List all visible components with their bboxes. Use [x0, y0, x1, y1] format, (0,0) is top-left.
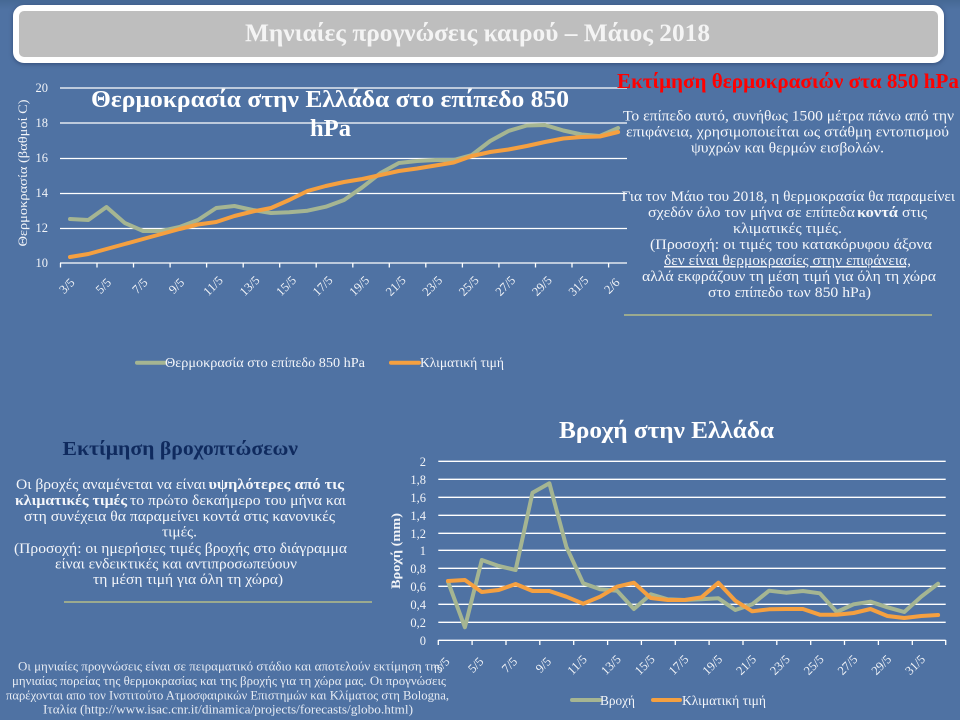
temperature legend: Θερμοκρασία στο επίπεδο 850 hPa — [165, 355, 365, 370]
temperature y axis labels: 18 — [36, 116, 48, 130]
temperature chart title: hPa — [310, 116, 351, 142]
temperature x axis labels: 11/5 — [200, 273, 226, 299]
text block: rainfall outlook: τιμές. — [162, 524, 197, 540]
text block: May outlook: σχεδόν όλο τον μήνα σε επίπεδα — [648, 205, 855, 221]
rainfall x axis labels: 27/5 — [835, 652, 860, 678]
temperature x axis labels: 31/5 — [566, 273, 591, 299]
temperature x axis labels: 21/5 — [383, 273, 409, 299]
rainfall x axis labels: 19/5 — [700, 652, 725, 678]
text block: rainfall outlook: τη μέση τιμή για όλη τη χώρα) — [93, 572, 283, 588]
rainfall x axis labels: 13/5 — [598, 652, 624, 678]
rainfall climatic value line — [448, 580, 938, 618]
rainfall x axis labels: 5/5 — [465, 654, 486, 676]
rainfall x axis labels: 11/5 — [565, 652, 590, 678]
temperature x axis labels: 15/5 — [273, 273, 299, 299]
text block: May outlook: κλιματικές τιμές. — [733, 221, 842, 237]
temperature x axis labels: 27/5 — [493, 273, 518, 299]
rainfall y axis labels: 0,4 — [410, 598, 427, 612]
temperature x axis labels: 17/5 — [310, 273, 336, 299]
text block: level description — [623, 108, 954, 156]
footer note: Ιταλία (http://www.isac.cnr.it/dinamica/projects/forecasts/globo.html) — [43, 702, 413, 716]
text block: May outlook: δεν είναι θερμοκρασίες στην επιφάνεια, — [664, 253, 911, 269]
rainfall y axis labels: 1,2 — [410, 527, 426, 541]
rainfall y axis labels — [410, 455, 427, 648]
text block: May outlook — [622, 189, 955, 301]
rainfall y axis labels: 1,6 — [410, 491, 426, 505]
rainfall x axis labels — [431, 652, 928, 678]
text block: May outlook: (Προσοχή: οι τιμές του κατακόρυφου άξονα — [650, 237, 932, 253]
rainfall y axis title: Βροχή (mm) — [389, 513, 403, 589]
text block: level description: ψυχρών και θερμών εισβολών. — [691, 140, 884, 156]
rainfall x axis labels: 31/5 — [902, 652, 928, 678]
text block: May outlook: αλλά εκφράζουν τη μέση τιμή για όλη τη χώρα — [642, 269, 936, 285]
temperature x axis labels: 3/5 — [56, 275, 78, 297]
rainfall y axis labels: 1,8 — [410, 473, 426, 487]
text block: May outlook: κοντά — [857, 205, 899, 221]
text block: rainfall outlook: κλιματικές τιμές — [15, 493, 128, 509]
header banner — [16, 8, 941, 60]
rainfall line chart — [389, 418, 946, 709]
rainfall y axis labels: 1,4 — [410, 509, 427, 523]
temperature y axis labels: 16 — [36, 151, 48, 165]
text block: rainfall outlook — [14, 477, 347, 588]
text block: May outlook: στο επίπεδο των 850 hPa) — [708, 285, 871, 301]
climatic value line — [70, 132, 618, 257]
temperature legend: Κλιματική τιμή — [420, 355, 504, 370]
temperature legend — [137, 355, 504, 370]
navy heading: Εκτίμηση βροχοπτώσεων — [62, 438, 298, 460]
temperature x axis labels: 9/5 — [166, 275, 187, 297]
text block: rainfall outlook: στη συνέχεια θα παραμείνει κοντά στις κανονικές — [24, 509, 335, 525]
rainfall x axis labels: 3/5 — [431, 654, 453, 676]
text block: rainfall outlook: είναι ενδεικτικές και αντιπροσωπεύουν — [55, 556, 297, 572]
panel: temperature estimate — [617, 69, 959, 316]
temperature x axis labels: 23/5 — [419, 273, 445, 299]
rainfall x axis labels: 17/5 — [666, 652, 691, 678]
rainfall x axis labels: 15/5 — [632, 652, 658, 678]
rainfall y axis labels: 0,8 — [410, 562, 426, 576]
temperature y axis labels: 20 — [36, 81, 48, 95]
temperature x axis labels: 5/5 — [93, 275, 114, 297]
text block: May outlook: στις — [902, 205, 927, 221]
temperature y axis labels: 10 — [36, 256, 48, 270]
temperature y axis labels: 14 — [36, 186, 49, 200]
rainfall x axis labels: 25/5 — [801, 652, 827, 678]
temperature y axis labels — [36, 81, 49, 270]
text block: level description: Το επίπεδο αυτό, συνήθως 1500 μέτρα πάνω από την — [623, 108, 954, 124]
text block: rainfall outlook: (Προσοχή: οι ημερήσιες τιμές βροχής στο διάγραμμα — [14, 541, 347, 557]
temperature line chart — [16, 81, 627, 370]
temperature y axis title: Θερμοκρασία (βαθμοί C) — [16, 100, 30, 246]
temperature chart title: Θερμοκρασία στην Ελλάδα στο επίπεδο 850 — [91, 87, 569, 113]
divider — [624, 314, 932, 316]
temperature x axis labels: 25/5 — [456, 273, 482, 299]
rainfall legend: Βροχή — [600, 694, 635, 709]
text block: rainfall outlook: υψηλότερες από τις — [208, 477, 345, 493]
text block: May outlook: Για τον Μάιο του 2018, η θερμοκρασία θα παραμείνει — [622, 189, 955, 205]
footer note: παρέχονται απο τον Ινστιτούτο Ατμοσφαιρικών Επιστημών και Κλίματος στη Bologna, — [6, 688, 449, 702]
text block: rainfall outlook: το πρώτο δεκαήμερο του μήνα και — [130, 493, 346, 509]
temperature chart title — [91, 87, 569, 142]
red heading: Εκτίμηση θερμοκρασιών στα 850 hPa — [617, 69, 959, 93]
panel: rainfall estimate — [14, 438, 372, 603]
chart gridlines and axis — [60, 88, 627, 268]
rainfall x axis labels: 21/5 — [733, 652, 759, 678]
footer note — [6, 658, 449, 716]
rainfall x axis labels: 29/5 — [869, 652, 894, 678]
rainfall legend: Κλιματική τιμή — [682, 694, 766, 709]
rainfall y axis labels: 1 — [420, 544, 426, 558]
divider — [64, 601, 372, 603]
rainfall y axis labels: 0,2 — [410, 616, 426, 630]
temperature y axis labels: 12 — [36, 221, 48, 235]
footer note: μηνιαίας πορείας της θερμοκρασίας και της βροχής για τη χώρα μας. Οι προγνώσεις — [12, 673, 447, 688]
rainfall chart title: Βροχή στην Ελλάδα — [559, 418, 775, 444]
temperature x axis labels — [56, 273, 623, 299]
temperature x axis labels: 29/5 — [529, 273, 555, 299]
temperature x axis labels: 2/6 — [601, 275, 623, 297]
rainfall legend — [572, 694, 766, 709]
rainfall x axis labels: 23/5 — [767, 652, 793, 678]
temperature x axis labels: 7/5 — [129, 275, 151, 297]
rainfall y axis labels: 0 — [420, 634, 426, 648]
text block: level description: επιφάνεια, χρησιμοποιείται ως στάθμη εντοπισμού — [626, 124, 949, 140]
title: Μηνιαίες προγνώσεις καιρού – Μάιος 2018 — [245, 20, 710, 47]
rainfall x axis labels: 9/5 — [533, 654, 554, 676]
rainfall gridlines and axis — [438, 461, 946, 645]
temperature x axis labels: 13/5 — [237, 273, 263, 299]
temperature x axis labels: 19/5 — [346, 273, 372, 299]
rainfall x axis labels: 7/5 — [499, 654, 520, 676]
text block: rainfall outlook: Οι βροχές αναμένεται να είναι — [16, 477, 206, 493]
rainfall y axis labels: 0,6 — [410, 580, 426, 594]
rainfall y axis labels: 2 — [420, 455, 426, 469]
rainfall series line — [448, 483, 938, 627]
footer note: Οι μηνιαίες προγνώσεις είναι σε πειραματικό στάδιο και αποτελούν εκτίμηση της — [18, 658, 443, 674]
temperature series line — [70, 125, 618, 231]
